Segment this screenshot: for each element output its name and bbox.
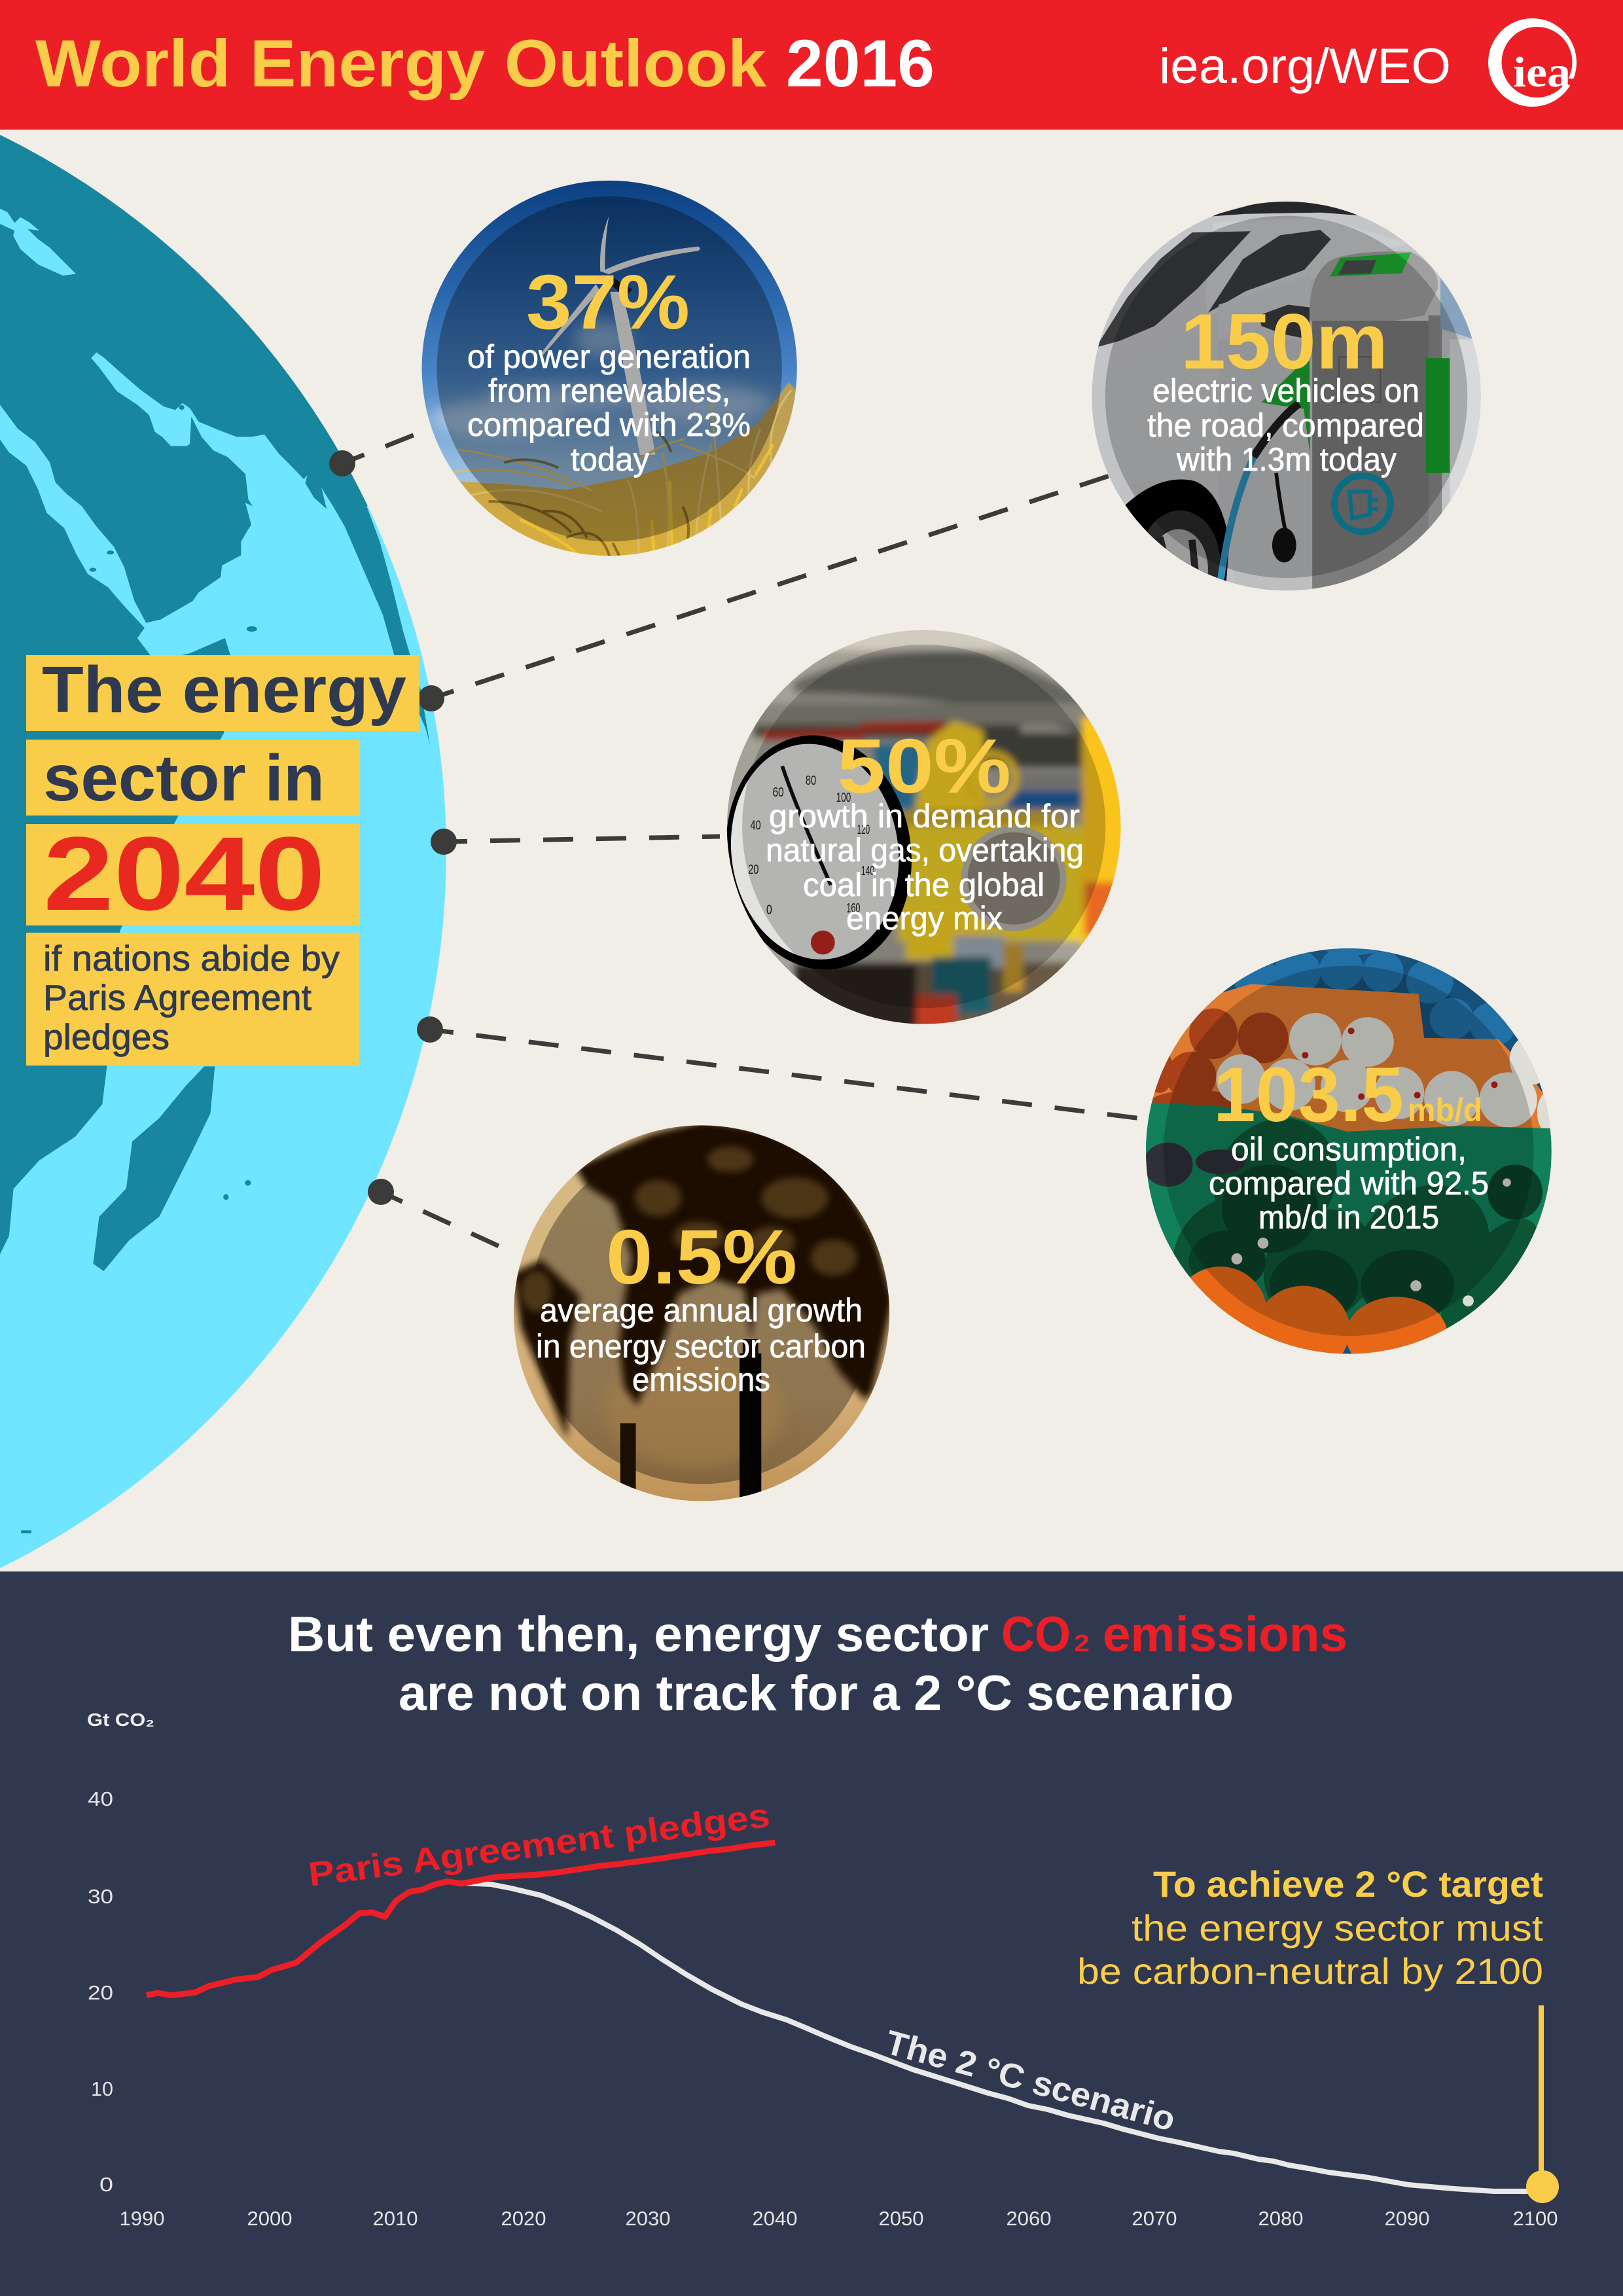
stat description: oil consumption, <box>1231 1131 1467 1168</box>
chart heading: CO <box>1001 1607 1071 1662</box>
stat description <box>467 338 751 478</box>
stat: 150m: 150m <box>1181 298 1388 386</box>
chart heading: But even then, energy sector <box>288 1607 989 1662</box>
stat description: average annual growth <box>540 1292 863 1329</box>
stat: 103.5 mb/d: mb/d <box>1408 1092 1482 1128</box>
x axis labels: 2040 <box>753 2207 797 2230</box>
panel: natural gas gauge photo: 100 <box>836 791 851 805</box>
stat description: coal in the global <box>803 867 1044 903</box>
x axis labels: 2080 <box>1258 2207 1303 2230</box>
line: 2 degree scenario <box>461 1883 1539 2191</box>
stat description: growth in demand for <box>769 798 1080 834</box>
heading panel: the energy sector in 2040 <box>26 653 419 1066</box>
stat: 0.5%: 0.5% <box>606 1214 797 1300</box>
stat description: in energy sector carbon <box>536 1328 866 1365</box>
chart heading: 2 <box>1074 1630 1090 1657</box>
stat description: with 1.3m today <box>1176 441 1397 478</box>
callout: achieve 2 degree target: To achieve 2 °C target <box>1153 1863 1543 1905</box>
y axis labels: 20 <box>88 1981 113 2004</box>
stat description: mb/d in 2015 <box>1258 1199 1439 1236</box>
y axis labels: 10 <box>91 2077 113 2100</box>
leader lines <box>342 435 1147 1252</box>
stat description: natural gas, overtaking <box>766 832 1084 869</box>
panel: natural gas gauge photo: 40 <box>750 818 761 833</box>
x axis labels: 2090 <box>1385 2207 1429 2230</box>
header band <box>0 0 1623 130</box>
panel: carbon emissions smoke photo <box>513 1125 890 1501</box>
title: World Energy Outlook <box>35 26 766 101</box>
panel: natural gas gauge photo: 60 <box>773 785 784 800</box>
x axis labels: 2020 <box>501 2207 546 2230</box>
panel: oil barrels photo <box>1146 948 1552 1354</box>
x axis labels: 1990 <box>120 2207 164 2230</box>
stat description: compared with 92.5 <box>1209 1165 1489 1202</box>
line: Paris Agreement pledges <box>147 1842 775 1995</box>
chart heading <box>288 1607 1347 1721</box>
callout: achieve 2 degree target: be carbon-neutral by 2100 <box>1077 1950 1543 1992</box>
website link: iea.org/WEO <box>1159 39 1451 94</box>
title year: 2016 <box>786 26 935 101</box>
callout: achieve 2 degree target: the energy sector must <box>1132 1907 1543 1948</box>
stat description <box>1147 372 1424 478</box>
heading sub text <box>43 938 340 1057</box>
y axis labels <box>88 1787 113 2196</box>
stat: 50%: 50% <box>837 723 1011 810</box>
icon: iea logo: iea <box>1513 48 1571 96</box>
stat description: compared with 23% <box>467 406 751 443</box>
heading line 2: sector in <box>43 742 325 815</box>
x axis labels: 2070 <box>1132 2207 1177 2230</box>
x axis labels: 2030 <box>626 2207 670 2230</box>
stat description <box>1209 1131 1489 1236</box>
y axis labels: 0 <box>99 2173 113 2196</box>
panel: emissions chart <box>0 1571 1623 2296</box>
x axis labels: 2010 <box>373 2207 418 2230</box>
line label: Paris Agreement pledges: Paris Agreement pledges <box>306 1797 772 1894</box>
y axis labels: 30 <box>88 1885 113 1908</box>
stat description: from renewables, <box>488 372 730 409</box>
icon: iea logo <box>1488 18 1578 107</box>
stat description <box>536 1292 866 1398</box>
target marker <box>1526 2005 1559 2203</box>
callout: achieve 2 degree target <box>1077 1863 1543 1992</box>
panel: electric vehicle photo <box>1092 202 1481 590</box>
x axis labels: 2050 <box>879 2207 923 2230</box>
y axis unit: Gt CO₂ <box>87 1710 154 1730</box>
stat description: of power generation <box>467 338 751 375</box>
chart heading: are not on track for a 2 °C scenario <box>399 1666 1234 1721</box>
panel: natural gas gauge photo: 80 <box>806 774 816 788</box>
x axis labels: 2100 <box>1513 2207 1558 2230</box>
heading sub text: pledges <box>43 1016 169 1057</box>
x axis labels: 2060 <box>1007 2207 1051 2230</box>
stat description: the road, compared <box>1147 407 1424 444</box>
x axis labels: 2000 <box>247 2207 292 2230</box>
panel: natural gas gauge photo: 160 <box>846 901 861 916</box>
leader dots <box>329 450 457 1205</box>
panel: renewables wind turbine photo <box>421 181 797 556</box>
heading sub text: if nations abide by <box>43 938 340 978</box>
y axis labels: 40 <box>88 1787 113 1810</box>
stat description: today <box>571 441 649 478</box>
panel: natural gas gauge photo: 120 <box>857 823 870 837</box>
stat: 37%: 37% <box>526 259 690 346</box>
stat description: emissions <box>632 1361 770 1398</box>
heading sub text: Paris Agreement <box>43 977 312 1018</box>
stat: 103.5 mb/d: 103.5 <box>1213 1052 1404 1138</box>
stat description: energy mix <box>846 900 1003 937</box>
stat description: electric vehicles on <box>1152 372 1419 409</box>
stat description <box>766 798 1084 937</box>
panel: natural gas gauge photo: 0 <box>766 903 772 917</box>
heading line 1: The energy <box>42 653 406 726</box>
panel: natural gas gauge photo: 140 <box>861 864 874 878</box>
line label: the 2 degree scenario: The 2 °C scenario <box>882 2024 1179 2139</box>
globe <box>0 135 446 1568</box>
panel: natural gas gauge photo <box>726 630 1120 1024</box>
heading year: 2040 <box>43 815 325 932</box>
panel: natural gas gauge photo: 20 <box>748 863 758 877</box>
x axis labels <box>120 2207 1558 2230</box>
chart heading: emissions <box>1103 1607 1347 1662</box>
